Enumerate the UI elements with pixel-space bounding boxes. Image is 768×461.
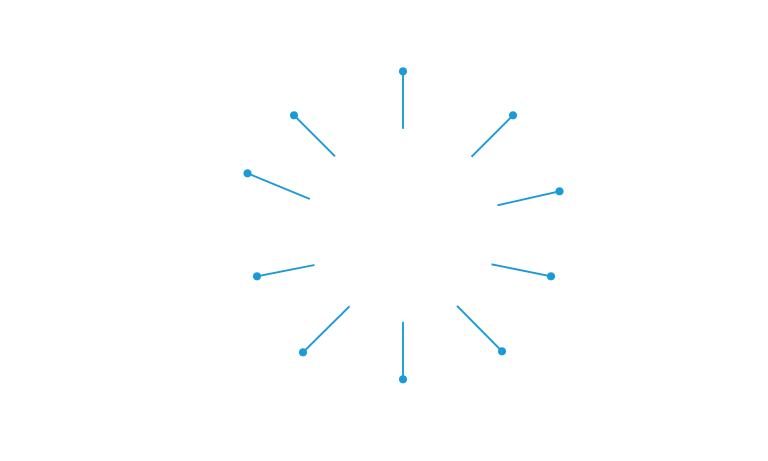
spoke: left upper [243,169,310,199]
spoke: upper left [290,111,335,156]
spoke: lower right [457,306,506,355]
spoke: left lower [253,265,314,280]
spoke: right lower [492,264,555,280]
spoke: lower left [299,306,350,356]
spoke: right upper [498,187,564,205]
spoke: upper right [472,111,517,157]
spoke: bottom [399,322,407,383]
spoke: top [399,67,407,129]
